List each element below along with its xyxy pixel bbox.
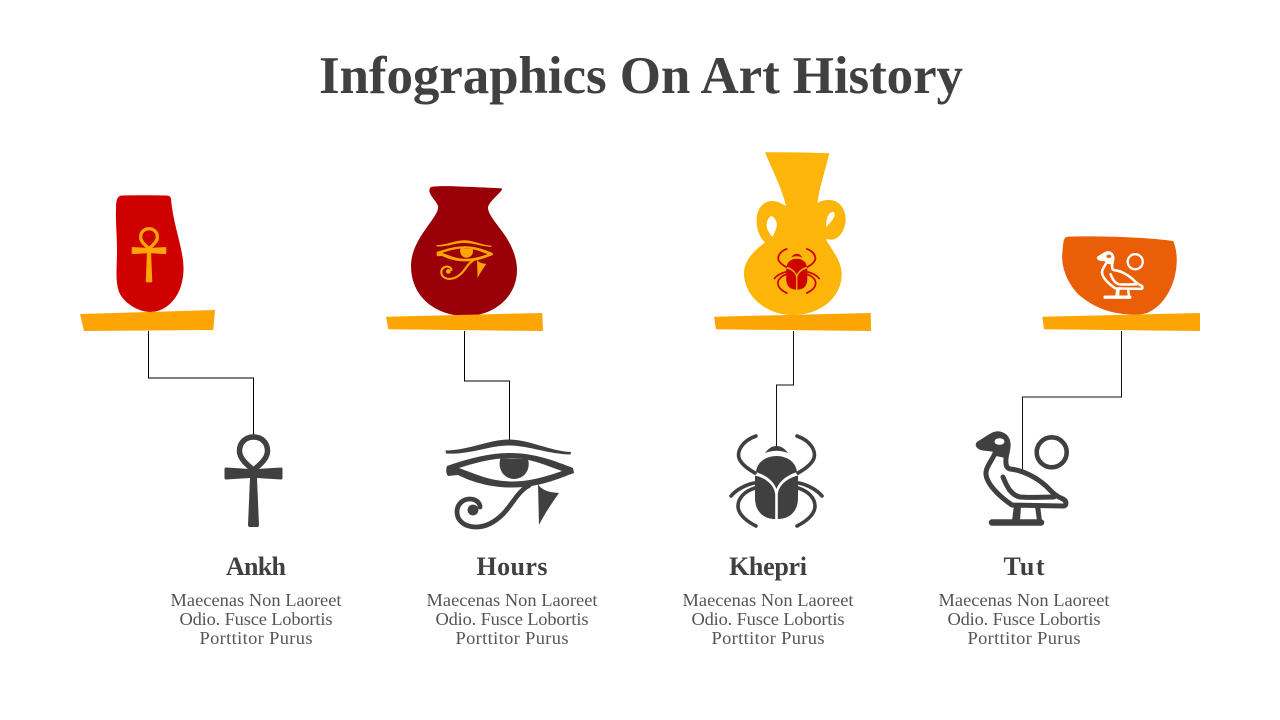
title: Infographics On Art History (319, 47, 963, 105)
text block: Khepri (682, 552, 854, 648)
text block: Tut: Tut (1004, 552, 1045, 581)
text block: Ankh: Porttitor Purus (200, 628, 312, 648)
connector: eye (464, 331, 510, 440)
text block: Hours: Maecenas Non Laoreet (426, 590, 598, 610)
icon: bird and sun (978, 434, 1067, 522)
text block: Tut: Maecenas Non Laoreet (938, 590, 1110, 610)
vase panel: scarab (714, 152, 871, 331)
orange bowl (1062, 236, 1177, 315)
text block: Ankh: Maecenas Non Laoreet (170, 590, 342, 610)
text block: Ankh: Ankh (226, 552, 287, 581)
shelf (80, 310, 215, 331)
connector: ankh (148, 331, 254, 436)
yellow amphora (744, 152, 846, 315)
text block: Hours (426, 552, 598, 648)
shelf (714, 313, 871, 331)
vase panel: ankh (80, 195, 215, 331)
text block: Tut: Odio. Fusce Lobortis (948, 609, 1100, 629)
icon: small scarab (774, 249, 819, 293)
icon: ankh (224, 437, 282, 527)
dark red vase (411, 186, 517, 316)
text block: Khepri: Maecenas Non Laoreet (682, 590, 854, 610)
icon: small bird (1098, 252, 1143, 297)
text block: Hours: Hours (476, 552, 548, 581)
text block: Tut: Porttitor Purus (968, 628, 1080, 648)
icon: eye of horus (446, 439, 574, 527)
text block: Ankh: Odio. Fusce Lobortis (180, 609, 332, 629)
icon: small ankh (132, 229, 166, 282)
red vase (116, 195, 184, 312)
vase panel: bird (1042, 236, 1200, 331)
icon: scarab (731, 436, 822, 526)
text block: Tut (938, 552, 1110, 648)
text block: Khepri: Odio. Fusce Lobortis (692, 609, 844, 629)
text block: Ankh (170, 552, 342, 648)
icon: small eye (436, 240, 493, 279)
connector: bird (1022, 331, 1122, 472)
text block: Hours: Odio. Fusce Lobortis (436, 609, 588, 629)
shelf (1042, 313, 1200, 331)
text block: Khepri: Porttitor Purus (712, 628, 824, 648)
vase panel: eye (386, 186, 543, 331)
text block: Hours: Porttitor Purus (456, 628, 568, 648)
shelf (386, 313, 543, 331)
connector: scarab (776, 331, 794, 447)
text block: Khepri: Khepri (729, 552, 807, 581)
